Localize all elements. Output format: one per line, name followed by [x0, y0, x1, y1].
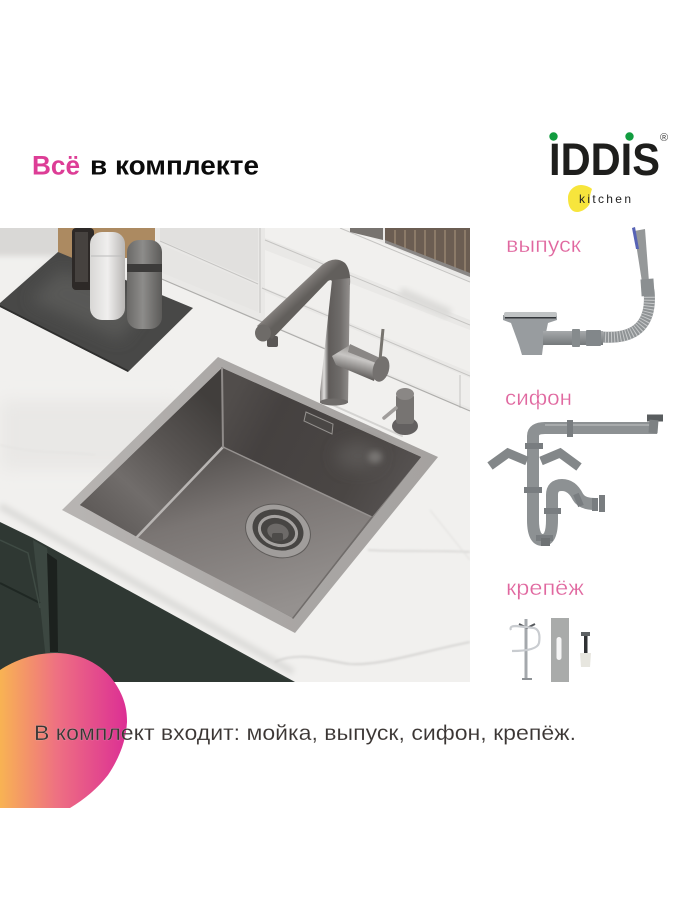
bolt bracket [511, 619, 539, 679]
counter front shadow [0, 506, 293, 672]
white bottle [90, 232, 125, 320]
label: сифон: сифон [505, 387, 572, 410]
logo: IDDIS kitchen: kitchen [579, 192, 631, 206]
grey bottle [127, 240, 162, 329]
logo: IDDIS kitchen: ® [660, 132, 668, 144]
drain [245, 504, 311, 558]
countertop [0, 228, 470, 682]
sink [62, 357, 438, 633]
part: drain with overflow [503, 227, 655, 355]
sink rim [62, 357, 438, 633]
logo: IDDIS kitchen [549, 132, 668, 212]
sink right wall [354, 462, 417, 540]
label: крепёж: крепёж [506, 577, 584, 600]
window rack [350, 228, 470, 277]
slate tray [0, 252, 193, 372]
part: fasteners [511, 618, 591, 682]
title: Всё [32, 150, 80, 180]
faucet [255, 259, 392, 406]
marble veins [276, 549, 470, 666]
wall tiles [155, 228, 470, 411]
gradient blob [0, 653, 127, 808]
faucet column [320, 278, 350, 403]
overflow [304, 412, 333, 434]
soap dispenser [384, 388, 418, 435]
faucet handle [332, 345, 380, 381]
bottom caption: В комплект входит: мойка, выпуск, сифон, крепёж. [34, 722, 576, 745]
cabinet [0, 522, 295, 682]
sink back wall [222, 368, 421, 517]
photo: kitchen sink [0, 222, 470, 682]
faucet spout [257, 259, 350, 339]
logo: IDDIS kitchen: IDDIS [549, 134, 660, 185]
title: в комплекте [90, 150, 259, 180]
dark bottle [72, 228, 94, 290]
faucet nozzle [267, 336, 278, 347]
plate [551, 618, 569, 682]
sink floor [137, 447, 372, 618]
screw [580, 632, 591, 667]
sink left wall [80, 368, 223, 537]
part: siphon [490, 418, 663, 542]
label: выпуск: выпуск [506, 234, 582, 257]
wooden board [58, 228, 155, 258]
